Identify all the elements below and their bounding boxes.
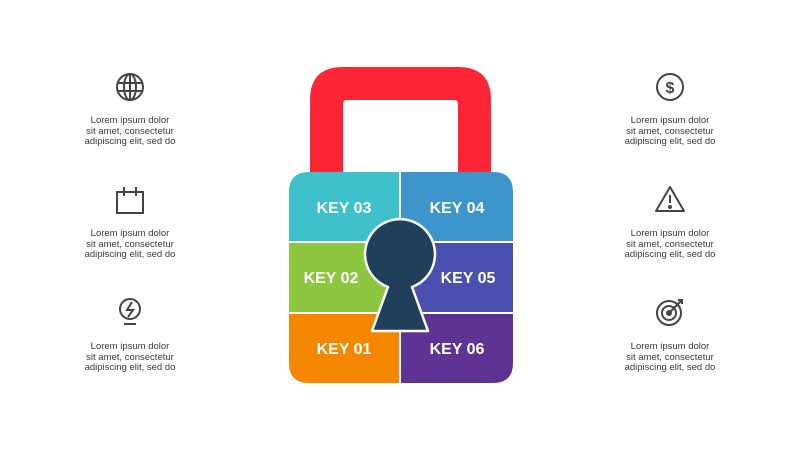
body segments <box>289 172 513 383</box>
text: right 2: sit amet, consectetur <box>626 238 714 250</box>
text: left 2: sit amet, consectetur <box>86 238 174 250</box>
text: left 1 <box>85 115 175 147</box>
labels: KEY 03 <box>317 200 372 217</box>
text: left 1: Lorem ipsum dolor <box>91 115 169 126</box>
padlock: KEY 01 <box>317 341 372 358</box>
text: left 3 <box>85 341 175 373</box>
text: left 2: Lorem ipsum dolor <box>91 228 169 239</box>
text: left 1: adipiscing elit, sed do <box>85 136 175 147</box>
text: left 1: sit amet, consectetur <box>86 126 174 136</box>
text: right 1: adipiscing elit, sed do <box>625 136 715 147</box>
text: right 3 <box>625 341 715 373</box>
text: left 3: Lorem ipsum dolor <box>91 341 169 352</box>
text: left 3: adipiscing elit, sed do <box>85 362 175 373</box>
icon: dollar <box>656 73 684 101</box>
text: right 3: sit amet, consectetur <box>626 352 714 362</box>
icon: bulb <box>119 298 141 325</box>
icon: dollar: $ <box>666 80 675 97</box>
shackle <box>310 67 491 172</box>
keyhole <box>365 219 435 331</box>
padlock: KEY 02 <box>304 270 359 287</box>
padlock: KEY 04 <box>430 200 485 217</box>
text: left 2 <box>85 228 175 260</box>
padlock: KEY 06 <box>430 341 485 358</box>
text: right 2: Lorem ipsum dolor <box>631 228 709 239</box>
text: right 3: Lorem ipsum dolor <box>631 341 709 352</box>
text: right 3: adipiscing elit, sed do <box>625 362 715 373</box>
text: right 1 <box>625 115 715 147</box>
text: right 1: sit amet, consectetur <box>626 126 714 136</box>
text: right 1: Lorem ipsum dolor <box>631 115 709 126</box>
icon: globe <box>116 73 144 101</box>
icon: warning <box>655 186 685 212</box>
text: right 2 <box>625 228 715 260</box>
text: left 3: sit amet, consectetur <box>86 352 174 362</box>
icon: calendar <box>116 187 144 214</box>
text: left 2: adipiscing elit, sed do <box>85 249 175 260</box>
padlock: KEY 05 <box>441 270 496 287</box>
text: right 2: adipiscing elit, sed do <box>625 249 715 260</box>
icon: target <box>656 299 683 326</box>
